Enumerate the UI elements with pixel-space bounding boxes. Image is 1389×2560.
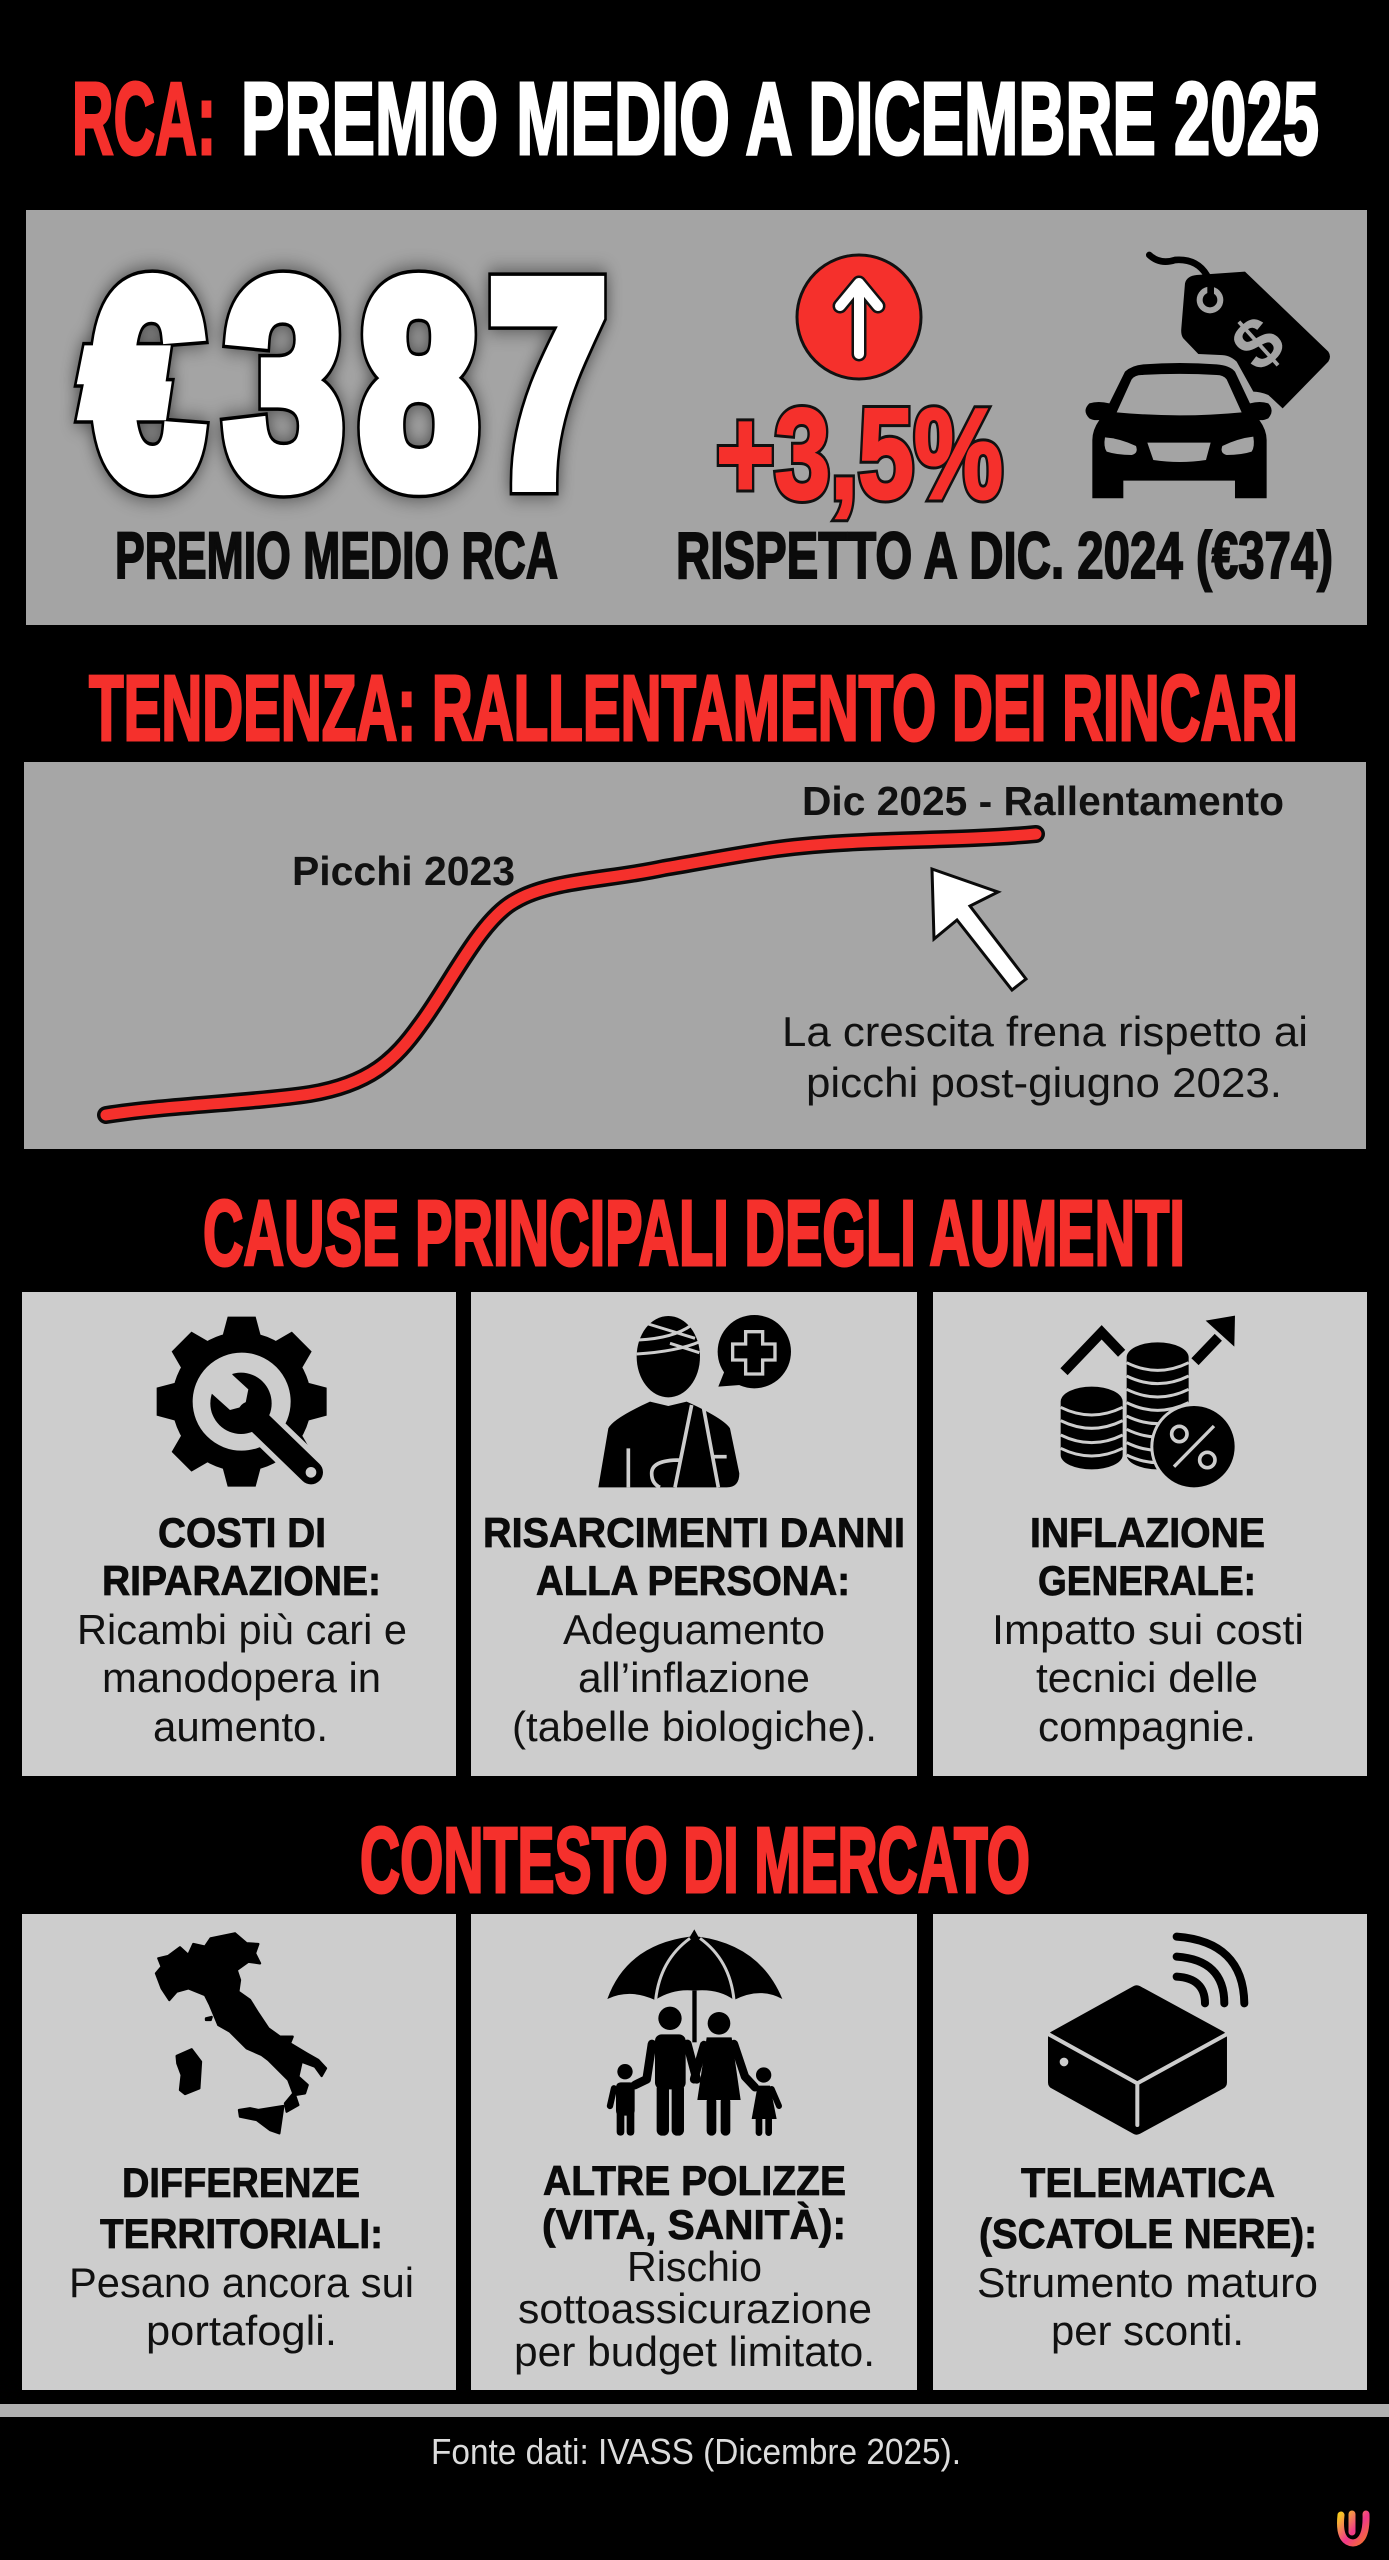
label: dic 2025: Dic 2025 - Rallentamento — [802, 778, 1284, 824]
big number: 387 euro: €387 — [84, 223, 607, 544]
icon: family under umbrella — [607, 1929, 782, 2136]
text: inflazione: INFLAZIONE — [1030, 1509, 1265, 1556]
panel: premio medio — [26, 210, 1367, 625]
annotation text: La crescita frena rispetto ai — [782, 1008, 1308, 1055]
panel: inflazione generale — [933, 1292, 1367, 1776]
text: risarcimenti — [483, 1509, 905, 1750]
logo — [1340, 2514, 1366, 2543]
text: altre polizze: sottoassicurazione — [518, 2285, 872, 2332]
line chart: premium trend — [106, 834, 1036, 1115]
title: RCA: — [72, 61, 216, 176]
text: telematica — [977, 2159, 1318, 2354]
text: differenze: portafogli. — [146, 2307, 337, 2354]
text: altre polizze: per budget limitato. — [514, 2328, 875, 2375]
text: telematica: (SCATOLE NERE): — [979, 2210, 1317, 2257]
icon: coins with percent — [1061, 1316, 1238, 1490]
panel: differenze territoriali — [22, 1914, 456, 2390]
value: +3,5%: +3,5% — [716, 383, 1003, 526]
text: inflazione: compagnie. — [1038, 1703, 1256, 1750]
label: picchi 2023: Picchi 2023 — [292, 848, 515, 894]
icon: car with price tag: $ — [1217, 300, 1300, 387]
panel: costi di riparazione — [22, 1292, 456, 1776]
text: altre polizze — [514, 2157, 875, 2375]
text: telematica: Strumento maturo — [977, 2259, 1318, 2306]
text: risarcimenti: RISARCIMENTI DANNI — [483, 1509, 905, 1556]
text: altre polizze: ALTRE POLIZZE — [543, 2157, 846, 2204]
text: risarcimenti: Adeguamento — [563, 1606, 825, 1653]
text: costi di riparazione: manodopera in — [102, 1654, 381, 1701]
text: costi di riparazione — [77, 1509, 407, 1750]
text: risarcimenti: ALLA PERSONA: — [536, 1557, 850, 1604]
annotation text — [782, 1008, 1308, 1106]
annotation text: picchi post-giugno 2023. — [806, 1059, 1282, 1106]
icon: car with price tag — [1085, 255, 1330, 498]
text: telematica: per sconti. — [1051, 2307, 1244, 2354]
icon: gear and wrench — [157, 1317, 327, 1487]
text: telematica: TELEMATICA — [1021, 2159, 1275, 2206]
icon: red up arrow — [797, 255, 921, 379]
big number: 387 euro: €387 — [84, 223, 607, 544]
footer source: Fonte dati: IVASS (Dicembre 2025). — [431, 2431, 961, 2472]
text: costi di riparazione: COSTI DI — [158, 1509, 326, 1556]
text: costi di riparazione: aumento. — [153, 1703, 328, 1750]
label: premio medio rca: PREMIO MEDIO RCA — [115, 518, 558, 592]
icon: injured person — [598, 1315, 791, 1487]
text: altre polizze: Rischio — [627, 2243, 762, 2290]
text: inflazione: GENERALE: — [1038, 1557, 1256, 1604]
text: costi di riparazione: RIPARAZIONE: — [102, 1557, 381, 1604]
panel: altre polizze — [471, 1914, 917, 2390]
text: costi di riparazione: Ricambi più cari e — [77, 1606, 407, 1653]
panel: risarcimenti danni — [471, 1292, 917, 1776]
text: inflazione — [992, 1509, 1304, 1750]
text: altre polizze: (VITA, SANITÀ): — [542, 2201, 846, 2248]
text: risarcimenti: (tabelle biologiche). — [512, 1703, 877, 1750]
icon: italy map — [156, 1933, 326, 2133]
icon: black box with signal — [1049, 1937, 1244, 2128]
panel: trend chart — [24, 762, 1366, 1149]
text: inflazione: tecnici delle — [1036, 1654, 1258, 1701]
text: inflazione: Impatto sui costi — [992, 1606, 1304, 1653]
big number: 387 euro: €387 — [84, 223, 607, 544]
panel: telematica — [933, 1914, 1367, 2390]
text: risarcimenti: all’inflazione — [578, 1654, 810, 1701]
text: differenze: TERRITORIALI: — [100, 2210, 383, 2257]
value: +3,5%: +3,5% — [716, 383, 1003, 526]
arrow: pointer to slowdown — [932, 869, 1026, 990]
text: differenze: DIFFERENZE — [122, 2159, 360, 2206]
text: differenze — [69, 2159, 414, 2354]
text: differenze: Pesano ancora sui — [69, 2259, 414, 2306]
